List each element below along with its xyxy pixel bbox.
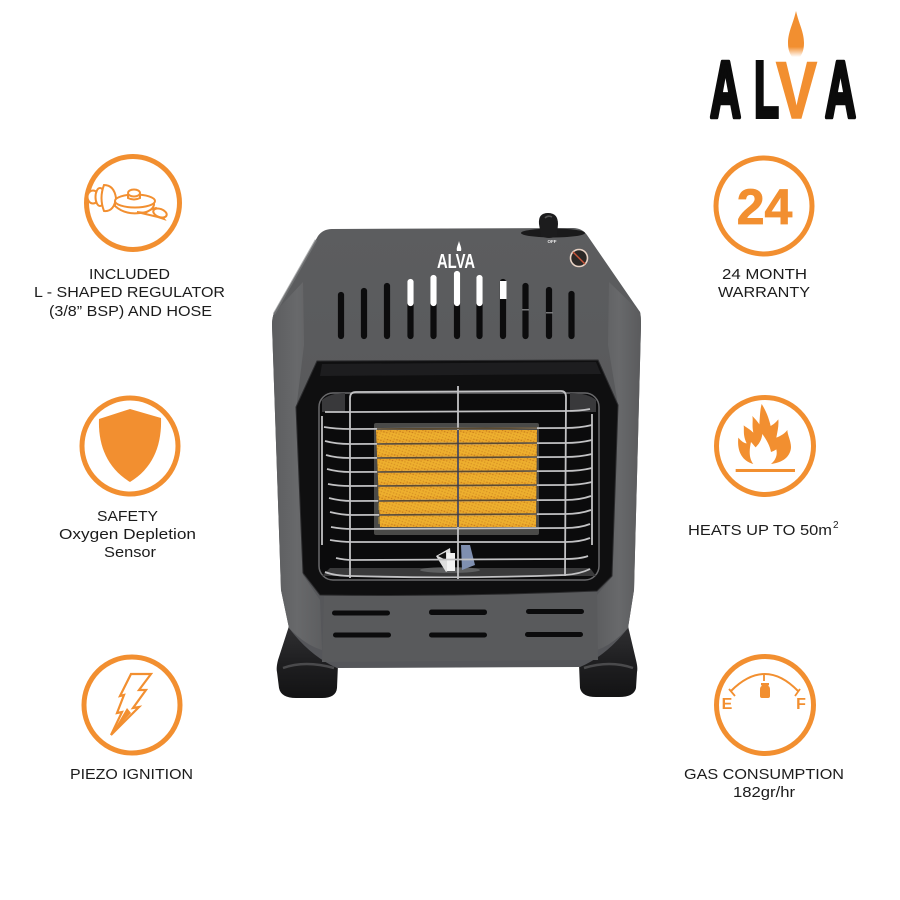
icon: 24 badge: 24: [737, 179, 792, 235]
label: regulator: INCLUDED: [89, 266, 170, 283]
label: warranty: 24 MONTH: [722, 266, 807, 283]
safety grille: [322, 386, 592, 579]
heater window: [319, 393, 599, 580]
label: safety: Sensor: [104, 544, 156, 561]
label: safety: Oxygen Depletion: [59, 526, 196, 543]
label: gas consumption: 182gr/hr: [733, 784, 795, 801]
feature: piezo ignition: [70, 657, 193, 783]
feature: safety: [59, 398, 196, 561]
label: regulator: [34, 266, 225, 320]
logo: ALVA: V: [776, 46, 817, 136]
label: warranty: WARRANTY: [718, 284, 810, 301]
feature: heating area: [688, 398, 839, 539]
icon: lightning bolt: [84, 657, 180, 753]
icon: fuel gauge: F: [796, 696, 806, 713]
heater body: [272, 228, 641, 668]
igniter: [436, 545, 475, 572]
label: safety: SAFETY: [97, 508, 158, 525]
label: gas consumption: [684, 766, 844, 801]
icon: shield: [82, 398, 178, 494]
heater logo: [437, 241, 475, 273]
control knob: OFF: [548, 239, 557, 244]
feature: gas consumption: [684, 656, 844, 801]
label: safety: [59, 508, 196, 561]
no smoking sticker: [570, 250, 588, 266]
label: piezo ignition: PIEZO IGNITION: [70, 766, 193, 783]
logo: ALVA: L: [754, 45, 779, 134]
icon: 24 badge: [716, 158, 812, 254]
front frame: [296, 360, 618, 596]
label: heating area: HEATS UP TO 50m: [688, 522, 832, 539]
logo: ALVA: A: [825, 45, 856, 134]
logo: ALVA: [710, 11, 856, 136]
label: regulator: (3/8” BSP) AND HOSE: [49, 303, 212, 320]
control knob: [521, 213, 585, 244]
label: gas consumption: GAS CONSUMPTION: [684, 766, 844, 783]
feet and base: [277, 626, 637, 698]
logo: ALVA: A: [710, 45, 741, 134]
heater product illustration: [272, 213, 641, 698]
icon: flame: [716, 398, 814, 494]
feature: regulator and hose: [34, 156, 225, 320]
bottom vents: [332, 609, 584, 638]
feature: warranty: [716, 158, 812, 301]
superscript 2: 2: [833, 520, 839, 531]
top vents: [341, 274, 572, 336]
icon: fuel gauge: E: [722, 696, 733, 713]
heater logo: ALVA: [437, 251, 475, 273]
label: regulator: L - SHAPED REGULATOR: [34, 284, 225, 301]
icon: fuel gauge: [716, 656, 814, 754]
ceramic burner: [374, 423, 539, 535]
icon: regulator: [86, 156, 180, 250]
label: warranty: [718, 266, 810, 301]
